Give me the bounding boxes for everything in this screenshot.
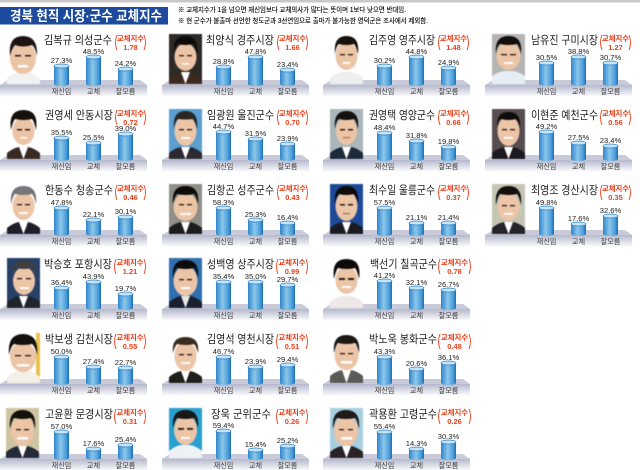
axis labels: 잘모름	[278, 162, 298, 171]
bar chart: 27.5%	[568, 133, 590, 142]
axis labels	[52, 386, 136, 395]
photo	[492, 34, 525, 84]
panel: 최영조 경산시장	[485, 183, 632, 247]
bar chart: 25.4%	[115, 435, 137, 444]
axis labels	[52, 237, 136, 246]
bar chart: 44.7%	[213, 122, 235, 131]
name: 최영조 경산시장	[531, 183, 598, 197]
replacement index	[276, 333, 308, 351]
replacement index	[116, 184, 146, 202]
photo	[7, 184, 40, 234]
replacement index	[276, 408, 308, 426]
bar chart: 27.3%	[51, 56, 73, 65]
axis labels	[375, 386, 459, 395]
axis labels: 교체	[249, 386, 262, 395]
name: 김복규 의성군수	[44, 34, 112, 47]
axis labels: 잘모름	[116, 162, 136, 171]
bar chart: 22.1%	[83, 210, 105, 219]
axis labels: 교체	[249, 311, 262, 320]
bar chart: 49.2%	[536, 122, 558, 131]
replacement index: 0.46	[123, 193, 138, 202]
axis labels: 교체	[410, 162, 423, 171]
name: 임광원 울진군수	[207, 108, 274, 122]
replacement index	[116, 34, 146, 52]
replacement index: 교체지수	[440, 109, 467, 118]
axis labels: 잘모름	[439, 237, 459, 246]
bar chart: 31.5%	[245, 129, 267, 138]
replacement index: 교체지수	[278, 258, 306, 267]
replacement index	[600, 184, 630, 202]
photo	[7, 258, 40, 308]
axis labels	[52, 311, 136, 320]
bar chart: 26.7%	[438, 280, 460, 289]
replacement index: 0.99	[285, 267, 299, 276]
replacement index: 교체지수	[116, 258, 144, 267]
axis labels: 교체	[87, 461, 100, 470]
photo	[330, 408, 363, 458]
axis labels: 잘모름	[116, 237, 136, 246]
panel: 고윤환 문경시장	[0, 407, 147, 470]
replacement index	[438, 258, 470, 276]
replacement index: 교체지수	[116, 333, 144, 342]
bar chart	[374, 422, 460, 460]
axis labels	[214, 237, 298, 246]
axis labels: 재신임	[537, 237, 556, 246]
top strip	[0, 0, 640, 2]
bar chart: 23.9%	[277, 134, 299, 143]
notes	[178, 5, 428, 25]
axis labels: 잘모름	[439, 461, 459, 470]
replacement index: 교체지수	[602, 34, 629, 43]
axis labels: 교체	[572, 162, 585, 171]
replacement index: 0.48	[447, 342, 462, 351]
bar chart: 23.4%	[277, 60, 299, 69]
panel: 박승호 포항시장	[0, 258, 147, 321]
bar chart: 28.8%	[213, 57, 235, 66]
replacement index: 0.72	[123, 118, 138, 127]
replacement index: 교체지수	[441, 258, 468, 267]
replacement index: 0.35	[608, 193, 623, 202]
photo	[330, 333, 363, 383]
bar chart: 24.9%	[438, 58, 460, 67]
bar chart: 36.4%	[51, 278, 73, 287]
axis labels: 잘모름	[601, 87, 621, 96]
bar chart	[536, 122, 622, 161]
replacement index: 교체지수	[440, 184, 467, 193]
bar chart: 43.3%	[374, 347, 396, 356]
bar chart: 19.8%	[438, 137, 460, 146]
panel: 곽용환 고령군수	[323, 408, 470, 470]
axis labels: 재신임	[52, 461, 71, 470]
axis labels: 잘모름	[601, 237, 621, 246]
bar chart: 35.5%	[51, 128, 73, 137]
bar chart: 17.6%	[83, 439, 105, 448]
replacement index	[278, 184, 308, 202]
panel: 권영세 안동시장	[0, 109, 147, 172]
bar chart: 43.9%	[83, 272, 105, 281]
photo	[6, 408, 39, 458]
name: 장욱 군위군수	[211, 408, 271, 421]
panel: 임광원 울진군수	[162, 108, 309, 172]
name: 한동수 청송군수	[45, 184, 113, 197]
axis labels: 잘모름	[116, 311, 136, 320]
bar chart: 55.4%	[374, 422, 396, 431]
axis labels: 재신임	[52, 237, 71, 246]
bar chart: 38.8%	[568, 47, 590, 56]
panel: 박보생 김천시장	[0, 332, 147, 396]
bar chart: 15.4%	[245, 440, 267, 449]
axis labels: 교체	[87, 87, 100, 96]
bar chart	[536, 198, 622, 236]
axis labels	[214, 386, 298, 395]
axis labels: 잘모름	[439, 386, 459, 395]
bar chart	[51, 124, 137, 161]
bar chart: 29.7%	[277, 275, 299, 284]
name: 권영세 안동시장	[45, 109, 113, 122]
bar chart: 22.7%	[115, 358, 137, 367]
bar chart	[213, 347, 299, 385]
axis labels: 재신임	[214, 237, 233, 246]
replacement index	[114, 408, 146, 426]
bar chart: 30.2%	[374, 56, 396, 65]
axis labels: 교체	[572, 237, 585, 246]
axis labels: 잘모름	[116, 386, 136, 395]
bar chart: 57.5%	[374, 198, 396, 207]
photo	[169, 109, 202, 159]
photo	[330, 109, 363, 159]
axis labels	[52, 87, 136, 96]
replacement index	[600, 34, 630, 52]
photo	[169, 408, 202, 458]
axis labels: 잘모름	[278, 386, 298, 395]
panel: 이현준 예천군수	[485, 108, 632, 172]
axis labels: 잘모름	[278, 87, 298, 96]
replacement index: 0.55	[123, 342, 137, 351]
replacement index	[438, 109, 468, 127]
replacement index: 교체지수	[279, 184, 306, 193]
axis labels: 재신임	[52, 386, 71, 395]
bar chart: 36.1%	[438, 353, 460, 362]
axis labels: 재신임	[375, 162, 394, 171]
axis labels: 재신임	[537, 87, 556, 96]
bar chart: 31.8%	[406, 131, 428, 140]
replacement index	[114, 258, 146, 276]
bar chart: 19.7%	[115, 284, 137, 293]
replacement index: 교체지수	[278, 333, 306, 342]
axis labels	[52, 162, 136, 171]
axis labels	[214, 311, 298, 320]
axis labels	[214, 162, 298, 171]
photo	[330, 34, 363, 84]
axis labels: 잘모름	[116, 87, 136, 96]
axis labels	[214, 461, 298, 470]
axis labels	[537, 87, 621, 96]
axis labels: 재신임	[375, 87, 394, 96]
replacement index	[438, 408, 470, 426]
axis labels: 잘모름	[439, 311, 459, 320]
name: 성백영 상주시장	[207, 258, 274, 271]
bar chart: 58.3%	[213, 198, 235, 207]
axis labels: 재신임	[375, 461, 394, 470]
bar chart	[536, 47, 622, 86]
bar chart: 14.3%	[406, 439, 428, 448]
axis labels	[375, 87, 459, 96]
replacement index: 교체지수	[117, 34, 144, 43]
bar chart: 41.2%	[374, 271, 396, 280]
replacement index: 교체지수	[440, 34, 467, 43]
bar chart: 23.4%	[600, 136, 622, 145]
panel: 김주영 영주시장	[323, 34, 470, 97]
notes: ※ 현 군수가 불출마 선언한 청도군과 3선연임으로 출마가 불가능한 영덕군은 조사에서 제외함.	[178, 16, 428, 25]
bar chart	[51, 272, 137, 310]
photo	[7, 109, 40, 159]
bar chart: 47.8%	[245, 47, 267, 56]
bar chart: 25.2%	[277, 436, 299, 445]
name: 박보생 김천시장	[45, 332, 113, 346]
axis labels	[537, 162, 621, 171]
replacement index	[438, 333, 470, 351]
replacement index	[438, 184, 468, 202]
bar chart: 48.4%	[374, 123, 396, 132]
replacement index: 0.37	[446, 193, 461, 202]
replacement index: 교체지수	[602, 184, 629, 193]
bar chart: 59.4%	[213, 421, 235, 430]
name: 고윤환 문경시장	[45, 407, 113, 421]
axis labels: 교체	[87, 237, 100, 246]
replacement index: 0.51	[285, 342, 299, 351]
replacement index: 교체지수	[441, 408, 468, 417]
panel: 최수일 울릉군수	[323, 183, 470, 247]
bar chart: 25.5%	[83, 133, 105, 142]
replacement index: 교체지수	[279, 109, 306, 118]
name: 이현준 예천군수	[531, 108, 598, 122]
name: 남유진 구미시장	[531, 34, 598, 47]
replacement index: 교체지수	[116, 408, 144, 417]
name: 김항곤 성주군수	[207, 184, 274, 197]
replacement index: 0.31	[123, 417, 137, 426]
bar chart: 30.7%	[600, 53, 622, 62]
name: 박승호 포항시장	[44, 258, 112, 271]
photo	[330, 258, 363, 308]
title: 경북 현직 시장·군수 교체지수	[10, 8, 162, 24]
replacement index: 교체지수	[602, 109, 629, 118]
axis labels	[375, 461, 459, 470]
axis labels: 재신임	[214, 87, 233, 96]
axis labels: 교체	[410, 237, 423, 246]
axis labels: 재신임	[52, 311, 71, 320]
bar chart: 48.5%	[83, 47, 105, 56]
name: 최수일 울릉군수	[369, 183, 435, 197]
photo	[330, 184, 363, 234]
axis labels: 교체	[249, 237, 262, 246]
replacement index: 1.66	[285, 43, 300, 52]
panel: 최양식 경주시장	[162, 33, 309, 97]
replacement index: 1.48	[446, 43, 461, 52]
replacement index	[600, 109, 630, 127]
axis labels: 잘모름	[601, 162, 621, 171]
bar chart	[51, 47, 137, 86]
bar chart	[213, 272, 299, 310]
axis labels: 교체	[87, 311, 100, 320]
panel: 김영석 영천시장	[162, 332, 309, 396]
bar chart: 32.6%	[600, 206, 622, 215]
photo	[492, 109, 525, 159]
bar chart	[51, 198, 137, 236]
replacement index: 1.27	[608, 43, 623, 52]
name: 김영석 영천시장	[207, 332, 274, 346]
bar chart	[213, 421, 299, 460]
name: 백선기 칠곡군수	[370, 258, 437, 271]
axis labels: 교체	[572, 87, 585, 96]
panel: 김항곤 성주군수	[162, 184, 309, 247]
panel: 김복규 의성군수	[0, 34, 147, 97]
bar chart: 35.4%	[213, 272, 235, 281]
axis labels: 재신임	[214, 461, 233, 470]
panel: 권영택 영양군수	[323, 109, 470, 172]
photo	[169, 184, 202, 234]
name: 박노욱 봉화군수	[369, 333, 437, 346]
replacement index: 교체지수	[278, 408, 306, 417]
bar chart: 17.6%	[568, 214, 590, 223]
bar chart: 25.3%	[245, 210, 267, 219]
bar chart	[51, 422, 137, 460]
replacement index	[276, 258, 308, 276]
bar chart	[213, 122, 299, 161]
axis labels: 교체	[87, 386, 100, 395]
name: 김주영 영주시장	[369, 34, 435, 47]
replacement index: 교체지수	[117, 109, 144, 118]
bar chart: 50.0%	[51, 347, 73, 356]
replacement index: 0.56	[608, 118, 623, 127]
photo	[7, 34, 40, 84]
bar chart: 24.2%	[115, 59, 137, 68]
bar chart: 35.0%	[245, 272, 267, 281]
bar chart	[374, 198, 460, 236]
photo	[169, 333, 202, 383]
bar chart	[374, 271, 460, 310]
axis labels: 재신임	[214, 162, 233, 171]
bar chart: 30.5%	[536, 53, 558, 62]
bar chart: 39.0%	[115, 124, 137, 133]
photo	[169, 258, 202, 308]
axis labels: 교체	[410, 87, 423, 96]
panel: 박노욱 봉화군수	[323, 333, 470, 396]
bar chart: 47.8%	[51, 198, 73, 207]
replacement index	[278, 109, 308, 127]
axis labels	[375, 311, 459, 320]
axis labels: 교체	[410, 386, 423, 395]
axis labels	[52, 461, 136, 470]
replacement index: 0.26	[447, 417, 462, 426]
photo	[7, 333, 40, 383]
axis labels: 재신임	[214, 311, 233, 320]
replacement index: 교체지수	[441, 333, 468, 342]
replacement index	[438, 34, 468, 52]
bar chart	[374, 123, 460, 161]
axis labels: 잘모름	[278, 311, 298, 320]
bar chart	[374, 347, 460, 385]
replacement index: 1.78	[123, 43, 138, 52]
bar chart	[51, 347, 137, 385]
axis labels	[214, 87, 298, 96]
name: 곽용환 고령군수	[369, 408, 437, 421]
axis labels: 교체	[410, 311, 423, 320]
axis labels	[537, 237, 621, 246]
axis labels: 재신임	[375, 237, 394, 246]
bar chart: 27.4%	[83, 357, 105, 366]
replacement index: 0.78	[447, 267, 462, 276]
panel: 백선기 칠곡군수	[323, 258, 470, 321]
photo	[492, 184, 525, 234]
replacement index: 0.66	[446, 118, 461, 127]
bar chart: 20.6%	[406, 359, 428, 368]
axis labels: 잘모름	[278, 237, 298, 246]
bar chart	[213, 198, 299, 236]
axis labels: 잘모름	[278, 461, 298, 470]
axis labels: 잘모름	[439, 87, 459, 96]
axis labels	[375, 237, 459, 246]
panel: 성백영 상주시장	[162, 258, 309, 321]
axis labels: 재신임	[52, 162, 71, 171]
bar chart: 21.1%	[406, 213, 428, 222]
replacement index: 0.70	[285, 118, 300, 127]
bar chart: 29.4%	[277, 355, 299, 364]
axis labels: 교체	[87, 162, 100, 171]
panel: 한동수 청송군수	[0, 184, 147, 247]
replacement index: 교체지수	[279, 34, 306, 43]
bar chart: 32.1%	[406, 278, 428, 287]
bar chart: 46.7%	[213, 347, 235, 356]
bar chart	[213, 47, 299, 86]
axis labels: 재신임	[214, 386, 233, 395]
replacement index	[116, 109, 146, 127]
axis labels: 재신임	[537, 162, 556, 171]
replacement index: 1.21	[123, 267, 137, 276]
bar chart: 16.4%	[277, 213, 299, 222]
bar chart: 21.4%	[438, 213, 460, 222]
axis labels: 교체	[249, 87, 262, 96]
axis labels: 교체	[410, 461, 423, 470]
axis labels	[375, 162, 459, 171]
bar chart: 23.9%	[245, 357, 267, 366]
bar chart: 30.1%	[115, 207, 137, 216]
axis labels: 재신임	[52, 87, 71, 96]
replacement index: 0.26	[285, 417, 299, 426]
replacement index	[278, 34, 308, 52]
replacement index	[114, 333, 146, 351]
bar chart: 44.8%	[406, 47, 428, 56]
replacement index: 0.43	[285, 193, 300, 202]
name: 최양식 경주시장	[206, 33, 274, 47]
bar chart: 57.0%	[51, 422, 73, 431]
bar chart: 49.8%	[536, 198, 558, 207]
axis labels: 재신임	[375, 386, 394, 395]
photo	[169, 34, 202, 84]
bar chart	[374, 47, 460, 86]
axis labels: 교체	[249, 461, 262, 470]
bar chart: 30.3%	[438, 432, 460, 441]
axis labels: 교체	[249, 162, 262, 171]
notes: ※ 교체지수가 1을 넘으면 재신임보다 교체의사가 많다는 뜻이며 1보다 낮으면 반대임.	[178, 5, 406, 14]
replacement index: 교체지수	[117, 184, 144, 193]
name: 권영택 영양군수	[369, 109, 435, 122]
axis labels: 재신임	[375, 311, 394, 320]
axis labels: 잘모름	[116, 461, 136, 470]
axis labels: 잘모름	[439, 162, 459, 171]
panel: 남유진 구미시장	[485, 34, 632, 97]
panel: 장욱 군위군수	[162, 408, 309, 470]
